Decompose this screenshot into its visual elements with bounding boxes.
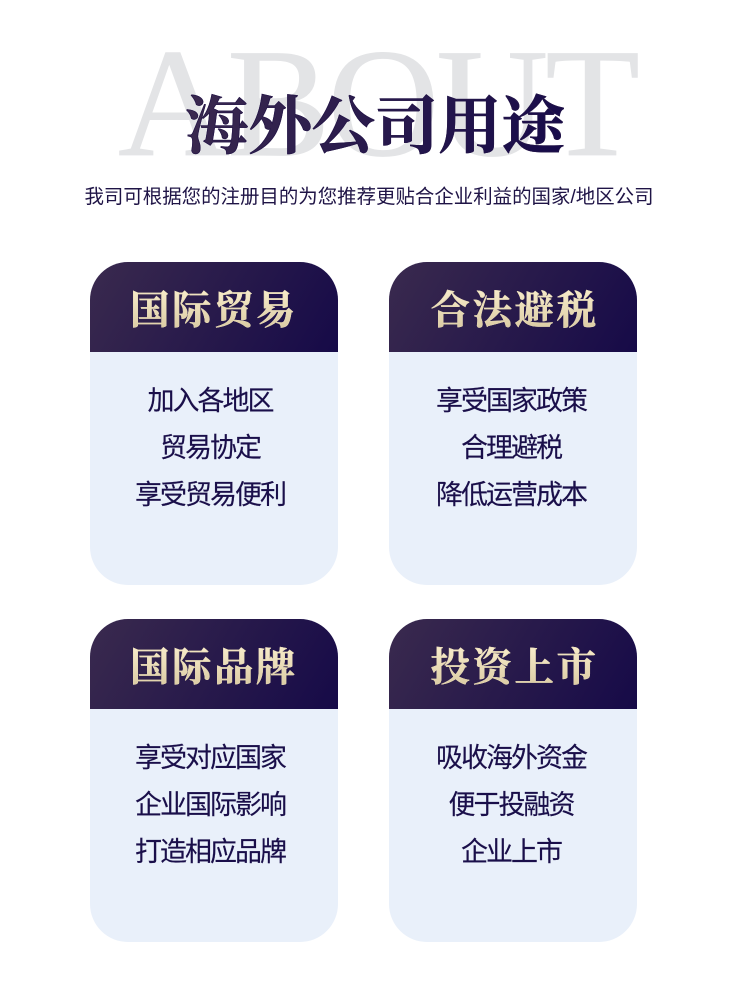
panel text: international trade: 享受贸易便利	[135, 480, 285, 510]
panel heading: investment and listing: 投资上市	[430, 646, 598, 690]
panel text: international trade	[135, 386, 285, 510]
panel text: investment and listing: 企业上市	[461, 837, 561, 867]
panel text: legal tax avoidance: 享受国家政策	[436, 386, 586, 416]
subtitle: 我司可根据您的注册目的为您推荐更贴合企业利益的国家/地区公司	[84, 186, 654, 208]
panel text: international trade: 加入各地区	[148, 386, 272, 416]
panel text: international brand: 企业国际影响	[135, 790, 285, 820]
panel: international trade	[90, 262, 338, 585]
panel text: international brand	[135, 743, 286, 867]
panel heading: investment and listing	[389, 619, 637, 709]
panel: international brand	[90, 619, 338, 942]
panel text: legal tax avoidance	[436, 386, 588, 510]
panel text: legal tax avoidance: 降低运营成本	[436, 480, 586, 510]
panel heading: legal tax avoidance: 合法避税	[430, 289, 598, 333]
panel text: legal tax avoidance: 合理避税	[461, 433, 561, 463]
panel heading: international brand: 国际品牌	[130, 646, 298, 690]
panel heading: international brand	[90, 619, 338, 709]
panel: legal tax avoidance	[389, 262, 637, 585]
panel heading: international trade: 国际贸易	[130, 289, 298, 333]
title: 海外公司用途	[185, 92, 565, 162]
panel text: investment and listing	[436, 743, 588, 867]
panel text: international brand: 打造相应品牌	[135, 837, 285, 867]
panel heading: international trade	[90, 262, 338, 352]
panel heading: legal tax avoidance	[389, 262, 637, 352]
background word: ABOUT: ABOUT	[118, 17, 637, 189]
panel text: international trade: 贸易协定	[160, 433, 260, 463]
panel text: investment and listing: 便于投融资	[448, 790, 574, 820]
panel: investment and listing	[389, 619, 637, 942]
panel text: investment and listing: 吸收海外资金	[436, 743, 586, 773]
panel text: international brand: 享受对应国家	[135, 743, 285, 773]
